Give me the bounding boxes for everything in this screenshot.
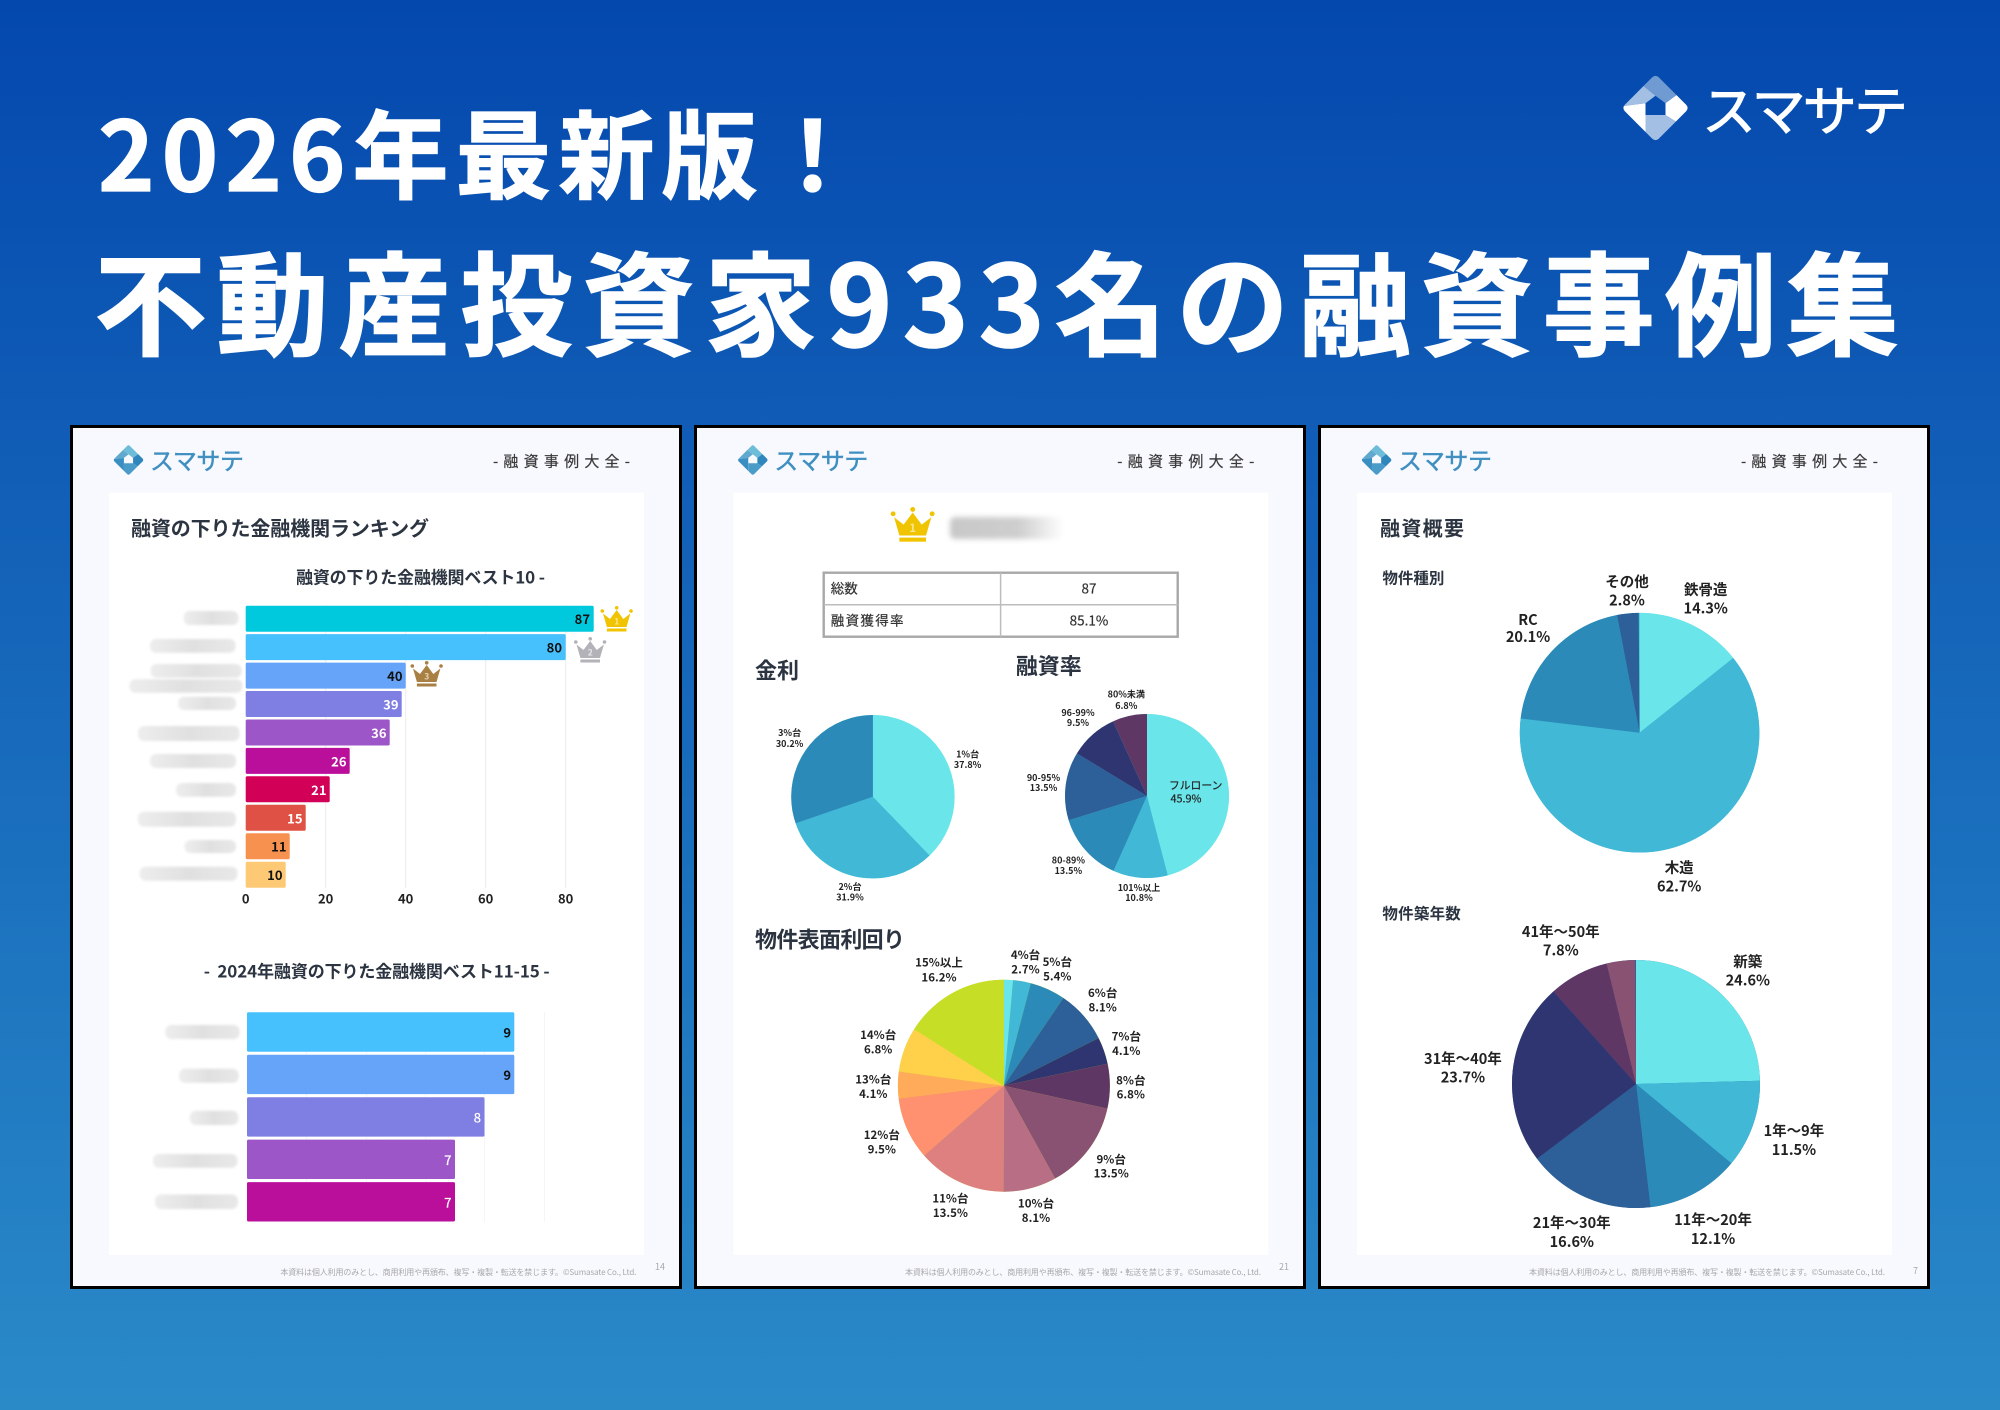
pie labels: surface yield: 10%台 (1018, 1196, 1055, 1212)
pie labels: loan ratio: 45.9% (1171, 791, 1202, 807)
pie labels: surface yield: 13.5% (1094, 1166, 1129, 1182)
icon: silver crown: 2 (588, 646, 593, 658)
pie chart: surface yield (898, 980, 1110, 1192)
icon: logo diamond (738, 445, 768, 475)
pie labels: property type: 14.3% (1684, 598, 1728, 618)
pie labels: interest rate: 3%台 (778, 726, 801, 739)
pie labels: surface yield: 12%台 (864, 1127, 900, 1143)
icon: bronze crown (410, 661, 443, 686)
pie labels: interest rate: 2%台 (839, 880, 861, 893)
page number: 21 (1279, 1260, 1289, 1273)
bar chart: best 11-15 (153, 1012, 544, 1222)
pie labels: surface yield: 7%台 (1112, 1029, 1141, 1045)
heading: loan ratio: 融資率 (1016, 649, 1082, 681)
icon: logo diamond (1362, 445, 1392, 475)
pie labels: surface yield: 14%台 (860, 1027, 897, 1043)
page number: 7 (1913, 1264, 1918, 1277)
axis labels (242, 888, 574, 908)
bar values: 40 (387, 666, 403, 685)
logo (1362, 445, 1490, 475)
pie labels: surface yield: 8.1% (1089, 999, 1117, 1015)
bar values: 7 (444, 1192, 452, 1211)
pie labels: surface yield: 13.5% (933, 1205, 968, 1221)
pie chart: property type (1520, 613, 1759, 853)
pie labels: property type: 2.8% (1609, 590, 1645, 610)
footer note: 本資料は個人利用のみとし、商用利用や再頒布、複写・複製・転送を禁じます。©Sumasate Co., Ltd. (280, 1267, 636, 1278)
pie labels: surface yield: 2.7% (1011, 961, 1040, 977)
heading: surface yield: 物件表面利回り (755, 922, 905, 954)
pie chart: loan ratio (1065, 714, 1229, 878)
heading: 融資の下りた金融機関ランキング (131, 512, 429, 542)
logo text: スマサテ (774, 442, 868, 476)
summary table: 総数 (831, 578, 858, 598)
pie labels: property type: 鉄骨造 (1684, 579, 1728, 600)
bar values: 11 (271, 837, 286, 856)
pie labels: loan ratio: 80-89% (1052, 854, 1085, 866)
pie labels: loan ratio: 9.5% (1067, 716, 1089, 729)
pie labels: surface yield (855, 947, 1146, 1226)
bar values (444, 1022, 511, 1211)
pie labels: building age: 23.7% (1441, 1066, 1485, 1088)
pie labels: building age (1424, 921, 1824, 1252)
title line 2: 不動産投資家933名の融資事例集 (94, 218, 1909, 380)
pie labels: loan ratio: 96-99% (1061, 706, 1095, 719)
pie labels: surface yield: 15%以上 (915, 955, 963, 971)
pie labels: loan ratio: 6.8% (1115, 699, 1138, 712)
pie chart: interest rate (791, 715, 955, 878)
icon: gold crown: 1 (909, 520, 916, 536)
pie labels: loan ratio: 13.5% (1030, 781, 1058, 794)
page number: 14 (655, 1260, 665, 1273)
panel body (1357, 493, 1892, 1255)
panel body (109, 493, 644, 1255)
pie labels: surface yield: 6.8% (864, 1041, 892, 1057)
pie labels: surface yield: 16.2% (921, 969, 957, 985)
bar values: 80 (547, 638, 562, 657)
pie labels: building age: 7.8% (1543, 940, 1579, 960)
pie labels: building age: 24.6% (1726, 970, 1770, 990)
pie labels: interest rate: 30.2% (776, 737, 804, 750)
pie labels: building age: 41年〜50年 (1522, 921, 1600, 942)
pie labels: loan ratio: 101%以上 (1118, 881, 1160, 894)
footer note: 本資料は個人利用のみとし、商用利用や再頒布、複写・複製・転送を禁じます。©Sumasate Co., Ltd. (905, 1267, 1261, 1278)
pie labels: loan ratio: 13.5% (1055, 864, 1082, 877)
heading: 融資概要 (1380, 512, 1464, 542)
pie labels: surface yield: 9.5% (868, 1141, 896, 1157)
pie labels: loan ratio (1027, 688, 1222, 904)
pie labels: interest rate (776, 726, 982, 904)
summary table: 87 (1082, 578, 1096, 598)
pie labels: surface yield: 4.1% (1112, 1043, 1140, 1059)
axis labels: 40 (398, 888, 414, 908)
bar values: 26 (331, 751, 347, 770)
bar values: 10 (267, 865, 283, 884)
logo text: スマサテ (150, 442, 244, 476)
bar values: 8 (474, 1107, 481, 1126)
pie labels: building age: 12.1% (1691, 1228, 1735, 1249)
icon: gold crown: 1 (614, 616, 619, 628)
footer note: 本資料は個人利用のみとし、商用利用や再頒布、複写・複製・転送を禁じます。©Sumasate Co., Ltd. (1529, 1267, 1885, 1278)
chart title: best 10: 融資の下りた金融機関ベスト10 - (296, 564, 545, 588)
icon: logo diamond (1623, 76, 1688, 140)
bar values: 36 (371, 723, 387, 742)
pie labels: surface yield: 8.1% (1022, 1210, 1050, 1226)
blurred bank names (153, 1025, 240, 1209)
bar values (267, 609, 590, 884)
axis labels: 20 (318, 888, 334, 908)
icon: gold crown (600, 606, 633, 632)
brand name: スマサテ (1702, 68, 1908, 146)
pie labels: surface yield: 13%台 (855, 1072, 892, 1088)
bar values: 87 (575, 609, 590, 628)
pie labels: surface yield: 11%台 (932, 1191, 969, 1207)
pie labels: interest rate: 37.8% (954, 758, 982, 771)
pie labels: loan ratio: 90-95% (1027, 771, 1060, 784)
icon: logo diamond (114, 445, 144, 475)
heading: interest rate: 金利 (755, 654, 799, 686)
pie labels: surface yield: 6.8% (1117, 1086, 1145, 1102)
panel body (733, 493, 1268, 1255)
icon: bronze crown: 3 (424, 670, 429, 682)
document header: -融資事例大全- (1117, 450, 1254, 472)
pie labels: property type: その他 (1605, 571, 1649, 592)
pie labels: surface yield: 5.4% (1043, 968, 1071, 984)
panel: top lender detail (696, 426, 1304, 1288)
panel: bank ranking (72, 426, 680, 1288)
bars (247, 1012, 514, 1222)
pie labels: loan ratio: 10.8% (1125, 891, 1153, 904)
logo (738, 445, 866, 475)
pie labels: surface yield: 8%台 (1116, 1072, 1146, 1088)
pie labels: property type: 20.1% (1506, 626, 1550, 647)
document header: -融資事例大全- (493, 450, 630, 472)
pie labels: surface yield: 4.1% (859, 1086, 887, 1102)
bars (246, 606, 594, 888)
bar values: 21 (311, 780, 326, 799)
axis labels: 60 (478, 888, 494, 908)
pie labels: property type: 62.7% (1657, 876, 1701, 896)
blurred bank name (950, 517, 1064, 539)
bar values: 7 (444, 1150, 452, 1169)
logo (114, 445, 242, 475)
document header: -融資事例大全- (1741, 450, 1878, 472)
summary table: 85.1% (1070, 610, 1108, 630)
pie labels: surface yield: 6%台 (1088, 985, 1118, 1001)
blurred bank names (129, 611, 242, 881)
pie labels: building age: 1年〜9年 (1764, 1120, 1824, 1141)
pie labels: building age: 11.5% (1772, 1139, 1816, 1160)
bar values: 9 (503, 1065, 511, 1084)
title line 1: 2026年最新版！ (98, 80, 868, 219)
axis labels: 0 (242, 888, 250, 908)
pie labels: interest rate: 31.9% (836, 890, 864, 904)
bar values: 15 (287, 808, 302, 827)
logo text: スマサテ (1398, 442, 1492, 476)
pie labels: property type: 木造 (1665, 857, 1694, 878)
brand logo top right (1623, 76, 1904, 140)
chart title: best 11-15: - 2024年融資の下りた金融機関ベスト11-15 - (204, 958, 550, 982)
icon: gold crown (891, 507, 935, 542)
pie labels: surface yield: 5%台 (1043, 954, 1072, 970)
pie labels: building age: 新築 (1733, 951, 1763, 972)
pie labels: surface yield: 9%台 (1097, 1151, 1126, 1167)
subheading: property type: 物件種別 (1382, 566, 1444, 588)
pie labels: loan ratio: 80%未満 (1108, 688, 1145, 700)
bar values: 9 (503, 1022, 511, 1042)
summary table (824, 573, 1178, 637)
bar values: 39 (383, 694, 398, 714)
summary table: 融資獲得率 (831, 610, 904, 630)
pie labels: building age: 11年〜20年 (1674, 1209, 1752, 1230)
pie labels: surface yield: 4%台 (1011, 947, 1041, 963)
bar chart: best 10 (129, 605, 633, 908)
pie labels: loan ratio: フルローン (1169, 777, 1222, 793)
pie labels: property type: RC (1518, 609, 1538, 630)
panel: loan overview (1320, 426, 1928, 1288)
pie labels: building age: 31年〜40年 (1424, 1048, 1502, 1069)
pie labels: property type (1506, 571, 1728, 896)
subheading: building age: 物件築年数 (1382, 902, 1461, 924)
icon: silver crown (574, 637, 606, 662)
pie labels: building age: 21年〜30年 (1533, 1212, 1611, 1233)
pie labels: interest rate: 1%台 (956, 748, 979, 760)
axis labels: 80 (558, 888, 574, 908)
pie chart: building age (1512, 960, 1760, 1208)
pie labels: building age: 16.6% (1550, 1231, 1594, 1252)
